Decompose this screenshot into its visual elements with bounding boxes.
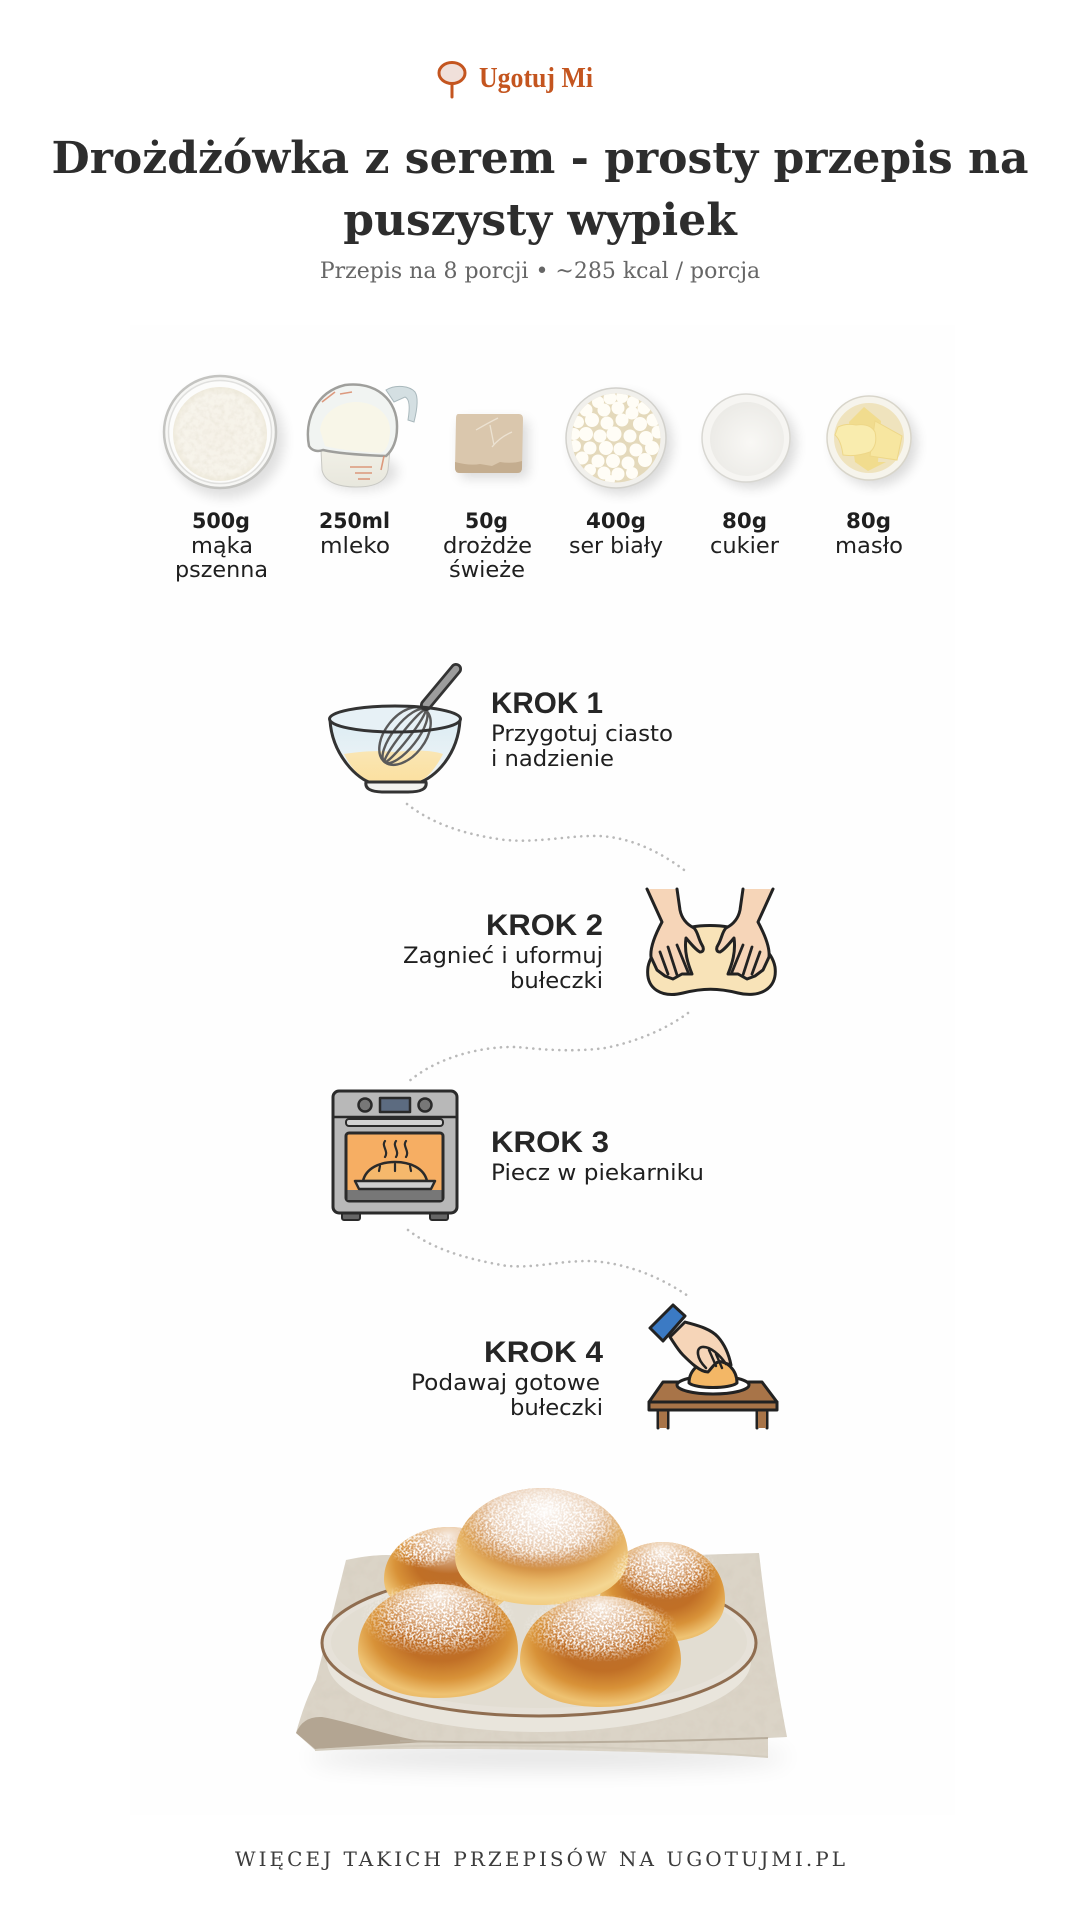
step 1 text: KROK 1 bbox=[491, 687, 603, 720]
bun: back left bbox=[384, 1527, 514, 1617]
icon: spoon logo bbox=[439, 62, 465, 97]
label: 250ml mleko: 250ml bbox=[319, 509, 390, 533]
label: 250ml mleko bbox=[319, 509, 390, 559]
label: 400g ser biały: 400g bbox=[586, 509, 646, 533]
ingredient: milk bbox=[308, 384, 417, 559]
icon: hand serving bun on table bbox=[649, 1305, 777, 1428]
ingredient: cheese bbox=[566, 388, 672, 559]
step 3 bbox=[333, 1091, 704, 1220]
icon: oven bbox=[333, 1091, 457, 1220]
step 1 bbox=[330, 669, 673, 792]
step 2 text: Zagnieć i uformuj bbox=[403, 943, 603, 969]
step 4 text bbox=[411, 1336, 603, 1421]
arrow: dotted path 2 bbox=[407, 1013, 688, 1083]
icon: bowl of butter bbox=[827, 396, 917, 486]
ingredient: butter bbox=[827, 396, 917, 559]
icon: bowl of cottage cheese bbox=[566, 388, 672, 494]
title: Drożdżówka z serem - prosty przepis na bbox=[52, 133, 1028, 184]
icon: bowl with whisk bbox=[330, 669, 460, 792]
powdered sugar speckle bbox=[360, 1484, 719, 1662]
label: 80g masło bbox=[835, 509, 903, 559]
subtitle: Przepis na 8 porcji • ~285 kcal / porcja bbox=[320, 259, 760, 284]
panel: ingredients bbox=[164, 376, 917, 583]
step 3 text: KROK 3 bbox=[491, 1126, 609, 1159]
icon: bowl of sugar bbox=[702, 394, 796, 488]
label: 400g ser biały bbox=[569, 509, 663, 559]
icon: hands kneading dough bbox=[647, 889, 775, 994]
step 3 text bbox=[491, 1126, 704, 1186]
arrow: dotted path 1 bbox=[407, 804, 688, 873]
label: 80g cukier: cukier bbox=[710, 534, 780, 559]
step 4 text: KROK 4 bbox=[484, 1336, 603, 1369]
step 4 text: Podawaj gotowe bbox=[411, 1370, 600, 1396]
step 1 text: i nadzienie bbox=[491, 746, 614, 772]
bun: top bbox=[455, 1488, 628, 1605]
icon: yeast block bbox=[455, 414, 528, 478]
label: 400g ser biały: ser biały bbox=[569, 534, 663, 559]
icon: measuring jug bbox=[308, 384, 417, 490]
icon: flour bowl bbox=[164, 376, 284, 498]
arrow: dotted path 3 bbox=[408, 1230, 688, 1296]
plate bbox=[322, 1570, 756, 1732]
label: 80g masło: masło bbox=[835, 534, 903, 559]
bun: front left bbox=[358, 1584, 518, 1698]
label: 250ml mleko: mleko bbox=[320, 534, 390, 559]
label: 500g mąka pszenna: 500g bbox=[192, 509, 250, 533]
label: 50g drożdże świeże: 50g bbox=[465, 509, 508, 533]
panel: steps bbox=[330, 669, 777, 1428]
step 4 text: bułeczki bbox=[510, 1395, 603, 1421]
ingredient: sugar bbox=[702, 394, 796, 559]
bun: front right bbox=[520, 1596, 681, 1707]
label: 50g drożdże świeże: świeże bbox=[449, 558, 525, 583]
image area background bbox=[130, 325, 955, 1815]
step 2 text: bułeczki bbox=[510, 968, 603, 994]
label: 500g mąka pszenna: mąka bbox=[191, 534, 253, 559]
step 2 text bbox=[403, 909, 603, 994]
step 1 text bbox=[491, 687, 673, 772]
label: 500g mąka pszenna bbox=[175, 509, 268, 583]
step 1 text: Przygotuj ciasto bbox=[491, 721, 673, 747]
step 2 bbox=[403, 889, 775, 994]
label: 80g cukier: 80g bbox=[722, 509, 767, 533]
shadow bbox=[308, 1747, 788, 1767]
label: 80g masło: 80g bbox=[846, 509, 891, 533]
logo wordmark: Ugotuj Mi bbox=[479, 63, 593, 94]
whisk bbox=[369, 698, 441, 774]
ingredient: flour bbox=[164, 376, 284, 583]
footer: WIĘCEJ TAKICH PRZEPISÓW NA UGOTUJMI.PL bbox=[235, 1846, 845, 1871]
label: 50g drożdże świeże: drożdże bbox=[443, 534, 532, 559]
label: 500g mąka pszenna: pszenna bbox=[175, 558, 268, 583]
photo: plate of buns bbox=[296, 1484, 788, 1767]
label: 80g cukier bbox=[710, 509, 780, 559]
bun: right bbox=[600, 1542, 725, 1642]
label: 50g drożdże świeże bbox=[443, 509, 532, 583]
step 3 text: Piecz w piekarniku bbox=[491, 1160, 704, 1186]
title bbox=[52, 133, 1028, 246]
ingredient: yeast bbox=[443, 414, 532, 583]
title: puszysty wypiek bbox=[343, 195, 738, 246]
step 4 bbox=[411, 1305, 777, 1428]
logo bbox=[439, 62, 593, 97]
step 2 text: KROK 2 bbox=[486, 909, 603, 942]
napkin bbox=[296, 1553, 787, 1757]
